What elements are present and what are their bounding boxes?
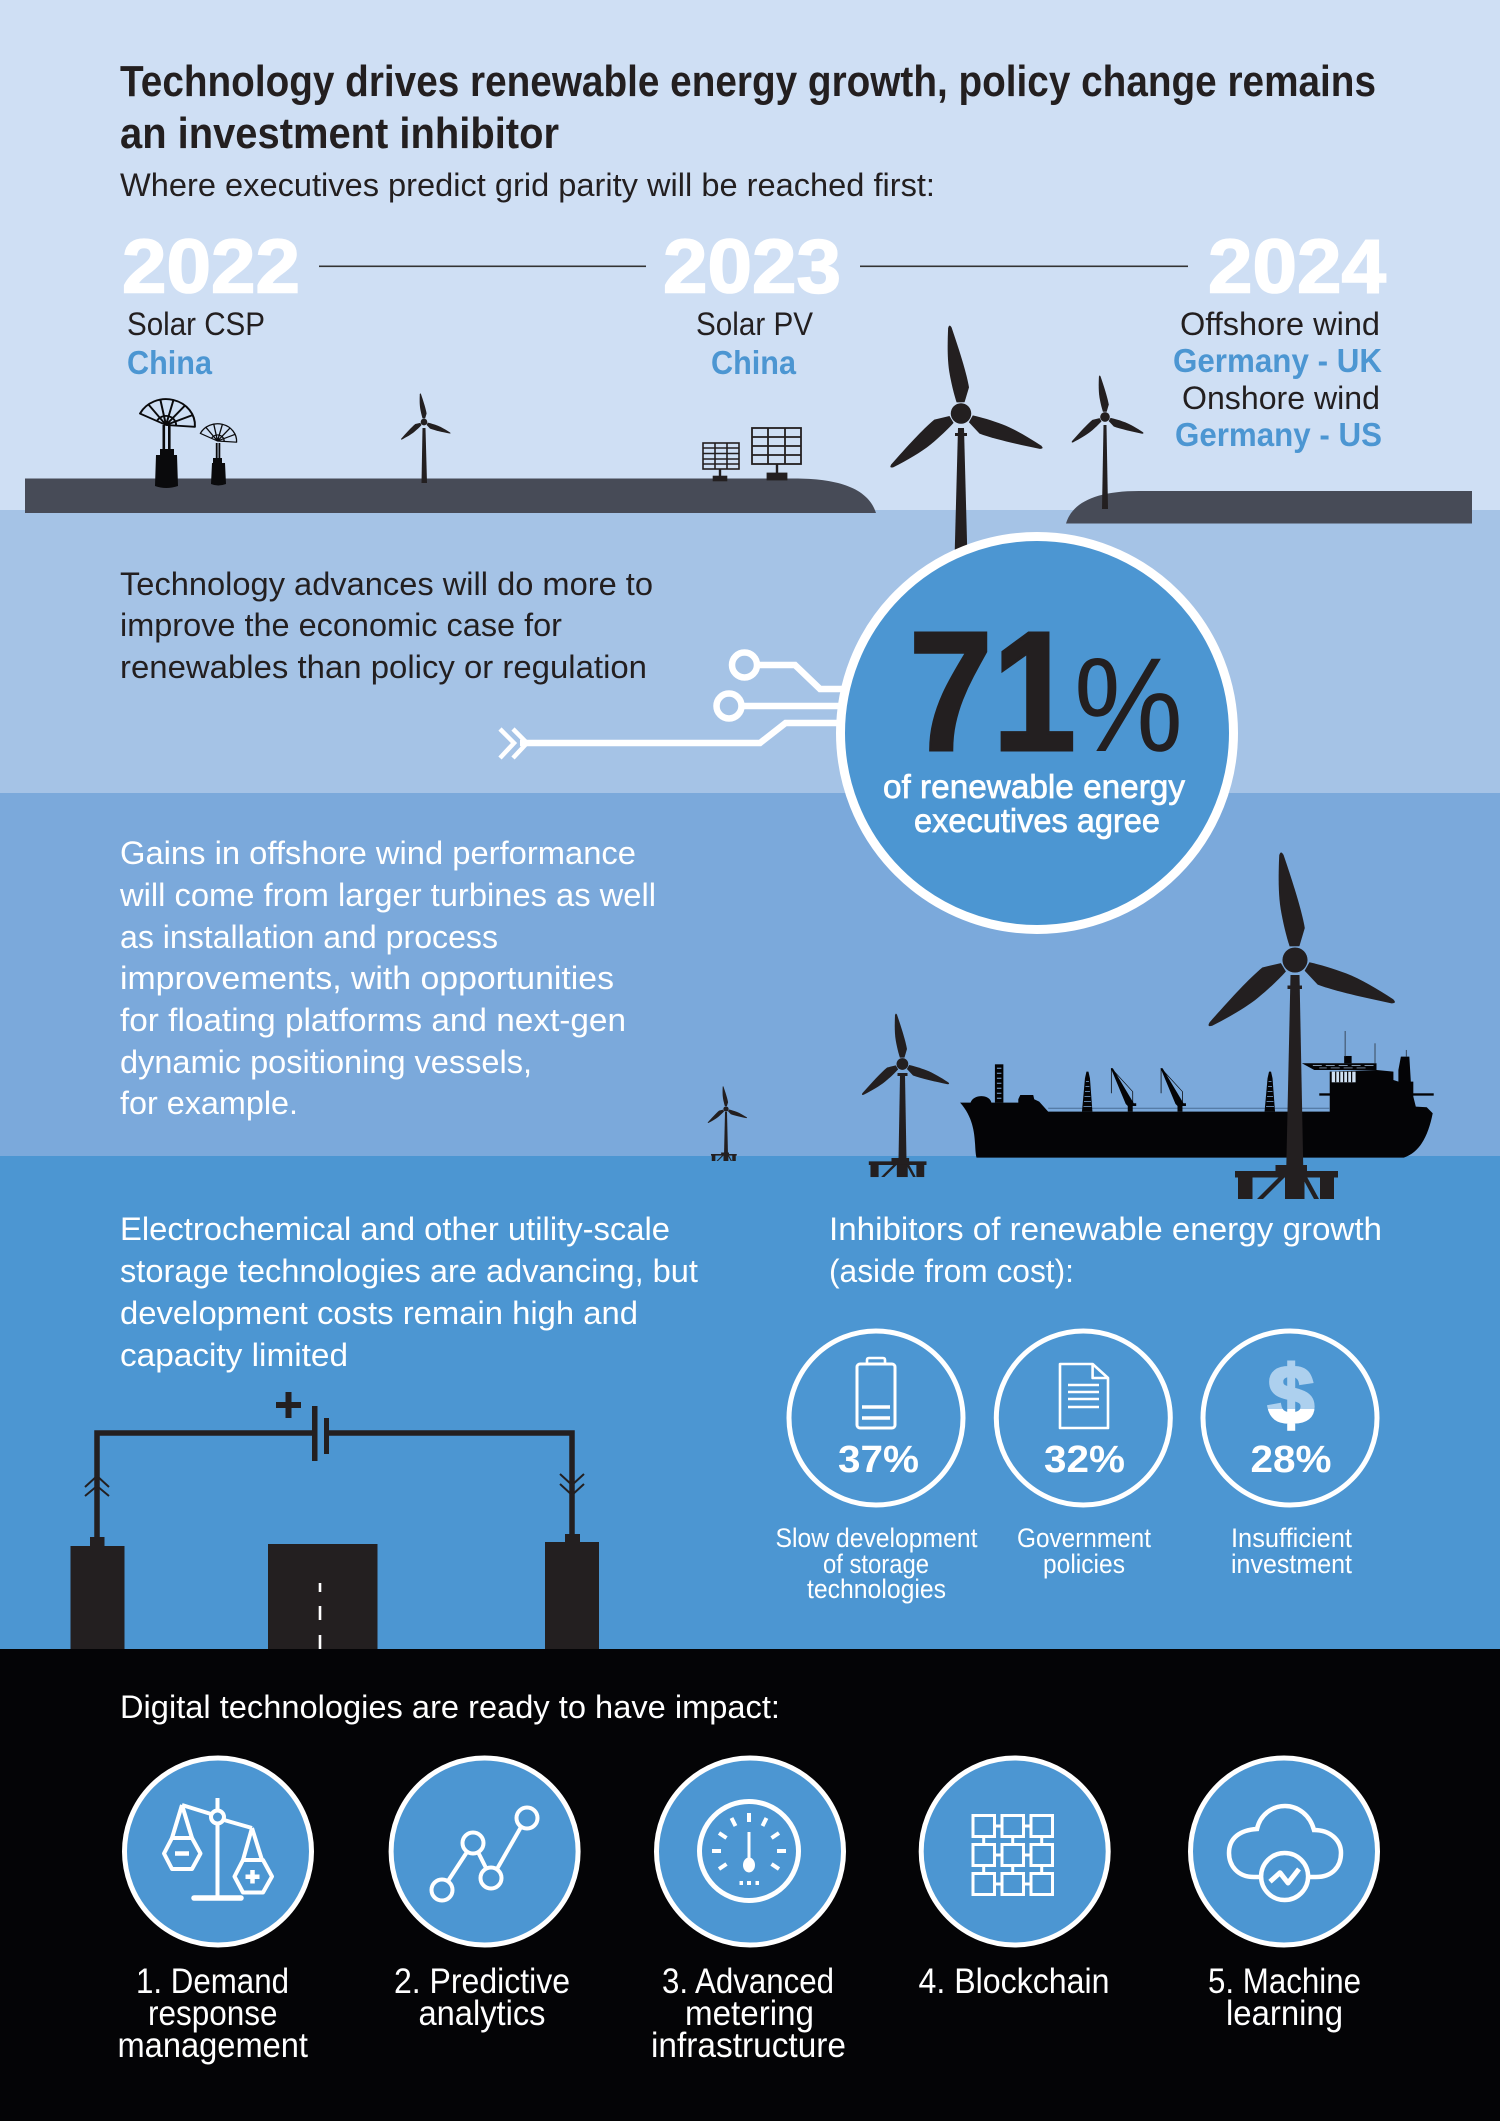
body text: offshore wind: improvements, with opportunities: [120, 960, 614, 996]
callout: 71 percent circle: of renewable energy: [883, 768, 1186, 805]
icon: dollar sign: $: [1268, 1350, 1314, 1441]
icon: cloud with chart: [1229, 1806, 1341, 1900]
inhibitor: storage technologies: Slow development: [776, 1523, 978, 1553]
timeline label: 2024: Onshore wind: [1182, 380, 1380, 416]
timeline: 2022: [122, 224, 300, 310]
timeline: 2024: [1208, 224, 1386, 310]
inhibitor: storage technologies: 37%: [838, 1439, 919, 1481]
icon: battery circuit diagram: [70, 1392, 599, 1649]
icon: balance scales: [164, 1798, 272, 1898]
panel: sky band: [0, 0, 1500, 510]
subtitle: Where executives predict grid parity will be reached first:: [120, 167, 935, 203]
timeline: [122, 224, 1386, 310]
title: an investment inhibitor: [120, 109, 559, 158]
digital item 5: machine learning: learning: [1226, 1994, 1343, 2033]
digital item 5: machine learning: [1190, 1758, 1378, 2033]
right landmass: [1066, 491, 1472, 524]
inhibitor: storage technologies: [776, 1331, 978, 1604]
body text: offshore wind: dynamic positioning vessels,: [120, 1044, 532, 1080]
timeline label: 2023: [696, 306, 813, 381]
icon: small floating turbine: [706, 1086, 748, 1161]
body text: storage: Electrochemical and other utility-scale: [120, 1211, 670, 1247]
icon: block grid: [973, 1816, 1052, 1894]
inhibitor: government policies: policies: [1043, 1549, 1125, 1579]
body text: offshore wind: [119, 835, 656, 1121]
body text: offshore wind: for floating platforms and next-gen: [120, 1002, 626, 1038]
body text: offshore wind: Gains in offshore wind performance: [120, 835, 636, 871]
left landmass: [25, 478, 876, 513]
inhibitor: storage technologies: of storage: [823, 1549, 929, 1579]
icon: gauge: [700, 1802, 798, 1900]
timeline: 2023: [663, 224, 841, 310]
timeline label: 2024: Germany - US: [1175, 416, 1382, 453]
body text: storage: capacity limited: [120, 1337, 348, 1373]
icon: line chart: [432, 1808, 538, 1900]
icon: low battery: [857, 1358, 895, 1428]
title: [120, 57, 1376, 158]
icon: circuit traces: [500, 652, 842, 758]
timeline label: 2023: Solar PV: [696, 306, 813, 342]
timeline label: 2022: [127, 306, 265, 381]
panel: storage and inhibitors band: [0, 1156, 1500, 1649]
body text: storage: [120, 1211, 698, 1373]
inhibitor: government policies: 32%: [1044, 1439, 1125, 1481]
digital item 4: blockchain: 4. Blockchain: [918, 1962, 1110, 2001]
panel: offshore wind band: [0, 793, 1500, 1156]
icon: small land wind turbine: [399, 393, 451, 483]
icon: large solar dish: [140, 399, 195, 488]
digital item 3: advanced metering infrastructure: infrastructure: [651, 2026, 846, 2065]
digital item 2: predictive analytics: analytics: [418, 1994, 546, 2033]
digital item 3: advanced metering infrastructure: [651, 1758, 846, 2065]
body text: storage: storage technologies are advancing, but: [120, 1253, 698, 1289]
digital item 1: demand response management: management: [118, 2026, 308, 2065]
digital item 2: predictive analytics: [391, 1758, 578, 2033]
callout: 71 percent circle: %: [1074, 631, 1183, 780]
digital item 3: advanced metering infrastructure: metering: [685, 1994, 814, 2033]
icon: small solar dish: [200, 424, 237, 486]
inhibitor: government policies: Government: [1017, 1523, 1152, 1553]
icon: large wind turbine: [884, 324, 1045, 560]
body text: storage: development costs remain high and: [120, 1295, 638, 1331]
digital item 1: demand response management: [118, 1758, 312, 2065]
inhibitor: insufficient investment: [1203, 1331, 1377, 1579]
digital item 4: blockchain: [918, 1758, 1110, 2001]
body text: technology advances: [120, 566, 653, 685]
timeline label: 2024: Germany - UK: [1173, 342, 1382, 379]
inhibitor: storage technologies: technologies: [807, 1574, 946, 1604]
heading: inhibitors: Inhibitors of renewable energy growth: [829, 1211, 1382, 1247]
digital item 1: demand response management: 1. Demand: [136, 1962, 289, 2001]
inhibitor: government policies: [996, 1331, 1170, 1579]
heading: inhibitors: [829, 1211, 1382, 1289]
callout: 71 percent circle: 71: [909, 597, 1076, 787]
inhibitor: insufficient investment: 28%: [1250, 1439, 1332, 1481]
icon: medium land wind turbine: [1069, 375, 1145, 509]
icon: small solar panel: [703, 443, 739, 480]
digital item 1: demand response management: response: [148, 1994, 278, 2033]
body text: offshore wind: will come from larger turbines as well: [119, 877, 656, 913]
timeline label: 2023: China: [711, 344, 797, 381]
body text: technology advances: Technology advances will do more to: [120, 566, 653, 602]
heading: digital technologies: Digital technologies are ready to have impact:: [120, 1689, 780, 1725]
inhibitor: insufficient investment: investment: [1231, 1549, 1353, 1579]
timeline label: 2024: Offshore wind: [1180, 306, 1380, 342]
callout: 71 percent circle: executives agree: [914, 802, 1160, 839]
inhibitor: insufficient investment: Insufficient: [1231, 1523, 1353, 1553]
body text: technology advances: renewables than policy or regulation: [120, 649, 647, 685]
panel: digital technologies band: [0, 1649, 1500, 2121]
icon: ship: [960, 1031, 1434, 1158]
timeline label: 2022: China: [127, 344, 213, 381]
body text: offshore wind: as installation and process: [120, 919, 498, 955]
digital item 2: predictive analytics: 2. Predictive: [394, 1962, 570, 2001]
body text: technology advances: improve the economic case for: [120, 607, 562, 643]
body text: offshore wind: for example.: [120, 1085, 298, 1121]
heading: inhibitors: (aside from cost):: [829, 1253, 1074, 1289]
icon: large floating turbine: [1200, 851, 1398, 1199]
callout: 71 percent circle: [840, 536, 1234, 930]
icon: medium floating turbine: [858, 1013, 951, 1177]
digital item 3: advanced metering infrastructure: 3. Advanced: [662, 1962, 834, 2001]
timeline label: 2022: Solar CSP: [127, 306, 265, 342]
panel: technology band: [0, 510, 1500, 793]
icon: large solar panel: [752, 428, 801, 480]
digital item 5: machine learning: 5. Machine: [1208, 1962, 1361, 2001]
icon: document: [1060, 1364, 1108, 1428]
timeline label: 2024: [1173, 306, 1382, 453]
